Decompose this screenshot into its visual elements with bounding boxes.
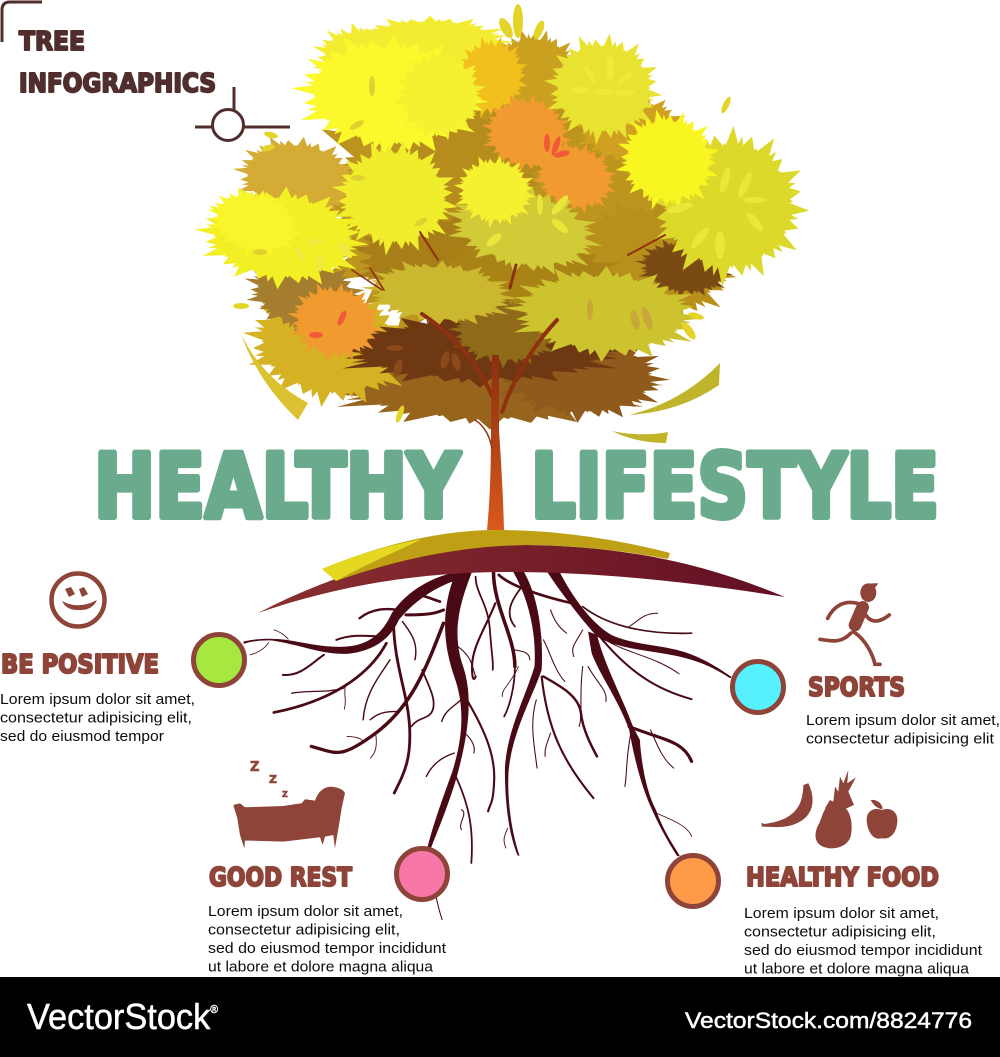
branches [352, 232, 665, 412]
front foliage layers [190, 26, 815, 371]
tree trunk [475, 355, 504, 530]
icon: runner [820, 583, 889, 664]
text: sports: Lorem ipsum dolor sit amet, [806, 713, 1000, 729]
icon: sleeping on sofa [233, 760, 345, 848]
sleep z letters [250, 760, 288, 799]
watermark footer bar [0, 977, 1000, 1057]
falling leaves [233, 4, 733, 423]
apple [867, 800, 897, 839]
subtitle: tree infographics [19, 27, 216, 99]
text: good rest: ut labore et dolore magna aliqua [208, 960, 434, 976]
heading: good rest: GOOD REST [209, 863, 352, 893]
subtitle: tree infographics: INFOGRAPHICS [19, 69, 216, 99]
text: healthy food: ut labore et dolore magna aliqua [744, 962, 970, 978]
sleep z letters: Z [269, 773, 277, 786]
watermark footer bar: VectorStock [27, 996, 219, 1037]
node: sports [732, 662, 784, 712]
sleep z letters: Z [282, 790, 288, 799]
text: good rest: sed do eiusmod tempor incididunt [208, 941, 446, 957]
text: sports: consectetur adipisicing elit [806, 732, 994, 748]
text: good rest: consectetur adipisicing elit, [208, 922, 400, 938]
pineapple [816, 770, 856, 848]
left motion arc [241, 334, 308, 420]
grass highlight [322, 539, 422, 581]
icon: fruits [762, 770, 897, 848]
node: good rest [396, 848, 448, 900]
main root stems [244, 572, 732, 856]
text: be positive: consectetur adipisicing elit, [0, 710, 192, 726]
dark under-canopy [324, 255, 708, 388]
right motion arcs [612, 363, 720, 443]
main title [94, 435, 939, 538]
node: be positive [194, 634, 244, 686]
icon: smiley face [52, 574, 104, 626]
text: good rest: Lorem ipsum dolor sit amet, [208, 904, 403, 920]
main title: HEALTHY [94, 435, 461, 538]
heading: be positive: BE POSITIVE [1, 650, 159, 680]
watermark footer bar: ® [210, 1004, 218, 1016]
corner bracket [2, 2, 42, 42]
heading: healthy food: HEALTHY FOOD [746, 863, 939, 893]
text: healthy food: consectetur adipisicing elit, [744, 924, 936, 940]
watermark footer bar: VectorStock.com/8824776 [685, 1008, 972, 1033]
heading: sports: SPORTS [808, 673, 905, 703]
roots [244, 572, 732, 920]
ground mound [258, 530, 785, 613]
subtitle: tree infographics: TREE [19, 27, 85, 57]
back foliage layers [227, 9, 748, 429]
node: healthy food [668, 856, 718, 906]
banana [762, 783, 813, 827]
grass layer [322, 530, 670, 581]
text: be positive: sed do eiusmod tempor [0, 729, 164, 745]
text: be positive: Lorem ipsum dolor sit amet, [0, 692, 195, 708]
crosshair marker [195, 87, 290, 140]
foliage leaf details [253, 56, 767, 378]
sleep z letters: Z [250, 760, 259, 775]
tree canopy [190, 4, 815, 429]
text: healthy food: Lorem ipsum dolor sit amet, [744, 906, 939, 922]
text: healthy food: sed do eiusmod tempor incididunt [744, 943, 982, 959]
